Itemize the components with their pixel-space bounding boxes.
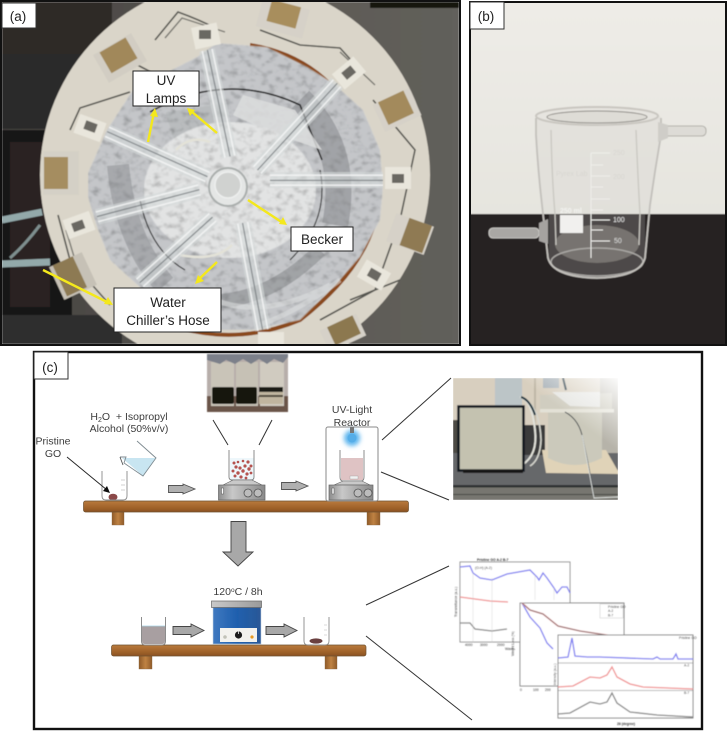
- chart: XRD: [553, 635, 697, 726]
- table 2: [112, 645, 366, 669]
- lamp sockets: [62, 23, 411, 346]
- callout: UV Lamps: [133, 71, 199, 106]
- chart: FTIR: (O-H) (A-2): [475, 566, 492, 570]
- arrow: to pristine GO: [67, 457, 110, 493]
- lamps: [199, 48, 237, 158]
- arrow 3: [173, 624, 204, 637]
- copper ring: [180, 45, 379, 335]
- photo: jacketed glass beaker: Pyrex Lab: [556, 171, 588, 178]
- photo: jacketed glass beaker: [470, 2, 726, 345]
- table 1: [84, 501, 408, 525]
- panel: (b) jacketed beaker photo: [470, 2, 726, 345]
- chart: XRD: Pristine GO: [679, 636, 697, 640]
- yellow arrows: [43, 108, 287, 305]
- ballasts: [98, 37, 140, 74]
- chart: FTIR: 2000: [497, 643, 505, 647]
- panel: (a) UV reactor photo: [1, 0, 460, 370]
- chart: TGA: A-2: [608, 609, 613, 613]
- callout: UV Lamps: Lamps: [146, 91, 187, 106]
- chart: FTIR: Transmittance (a.u.): [454, 587, 458, 617]
- chart: FTIR: [454, 558, 570, 651]
- nozzles: [664, 126, 706, 136]
- photo: three sample jars: [207, 354, 288, 412]
- beaker with pristine GO: [102, 471, 127, 500]
- text: solvent: Alcohol (50%v/v): [90, 423, 168, 435]
- chart: XRD: B-7: [684, 691, 689, 695]
- label: (a): [2, 3, 36, 28]
- label: (c): [34, 352, 68, 379]
- chart: XRD: Intensity (a.u.): [553, 664, 557, 685]
- callout: Water Chiller's Hose: [114, 288, 221, 332]
- text: solvent: 2: [98, 417, 102, 424]
- chart: FTIR: Wave: [505, 647, 514, 651]
- photo: reactor seen from above: [2, 0, 459, 370]
- photo: chiller and UV reactor: [453, 378, 618, 500]
- photo: jacketed glass beaker: 250 ml: [560, 208, 582, 215]
- smooth grey foil bands: [118, 165, 165, 285]
- text: UV-Light Reactor: Reactor: [334, 417, 371, 429]
- callout: UV Lamps: UV: [157, 73, 175, 88]
- UV-light reactor: [326, 427, 378, 501]
- callout: Water Chiller's Hose: Chiller’s Hose: [126, 313, 210, 328]
- text: temperature and time: C / 8h: [235, 586, 263, 598]
- text: Pristine GO: Pristine: [35, 436, 71, 448]
- central beaker ring: [209, 168, 247, 206]
- chart: TGA: Pristine GO: [608, 605, 626, 609]
- photo: jacketed glass beaker: 100: [613, 217, 625, 224]
- label: (c): (c): [42, 360, 58, 375]
- chart: TGA: 200: [545, 688, 551, 692]
- chart: XRD: 2θ (degree): [617, 722, 635, 726]
- text: solvent: H: [90, 411, 98, 423]
- arrow 1: [168, 484, 195, 494]
- chart: FTIR: 4000: [465, 643, 473, 647]
- arrow 4: [266, 624, 297, 637]
- text: solvent: [90, 411, 168, 435]
- arrow 2: [282, 481, 308, 491]
- text: UV-Light Reactor: UV-Light: [332, 404, 372, 416]
- icon: pouring flask: [120, 441, 156, 476]
- callout: Becker: [291, 227, 353, 251]
- lines from photo to beaker: [213, 420, 272, 445]
- graduations: [591, 153, 610, 258]
- charts: characterisation results: [454, 558, 697, 726]
- lines to reactor photo: [381, 378, 451, 500]
- panel: (c) process diagram: [34, 352, 702, 729]
- chart: TGA: 100: [533, 688, 539, 692]
- beaker with grey liquid: [142, 617, 166, 645]
- stirrer with beaker and red particles: [218, 450, 265, 500]
- panel border c: [34, 352, 702, 729]
- label: (a): (a): [10, 9, 26, 24]
- chart: FTIR: Pristine GO A-2 B-7: [477, 558, 508, 562]
- callout: Becker: Becker: [301, 232, 344, 247]
- text: UV-Light Reactor: [332, 404, 372, 429]
- text: temperature and time: 120: [213, 586, 231, 598]
- oven: [212, 601, 262, 644]
- label: (b): (b): [478, 9, 494, 24]
- callout: Water Chiller's Hose: Water: [150, 295, 186, 310]
- diagram: synthesis line: [35, 354, 472, 720]
- label: (b): [470, 2, 504, 29]
- photo: jacketed glass beaker: 50: [614, 238, 622, 245]
- chart: TGA: B-7: [608, 614, 613, 618]
- panel border a: [1, 1, 460, 345]
- chart: FTIR: 3000: [480, 643, 488, 647]
- photo: jacketed glass beaker: 200: [613, 174, 625, 181]
- chart: TGA: [511, 603, 626, 692]
- chart: XRD: A-2: [684, 664, 689, 668]
- chart: TGA: Weight Loss (%): [511, 631, 515, 656]
- text: Pristine GO: [35, 436, 71, 460]
- text: solvent: O + Isopropyl: [102, 411, 168, 423]
- beaker with dried product: [304, 617, 329, 645]
- text: temperature and time: o: [231, 587, 235, 594]
- lines to charts: [366, 566, 472, 720]
- chart: TGA: 0: [520, 688, 522, 692]
- photo: jacketed glass beaker: 250: [613, 150, 625, 157]
- big down arrow: [223, 522, 253, 566]
- panel border b: [470, 2, 726, 345]
- text: Pristine GO: GO: [45, 448, 61, 460]
